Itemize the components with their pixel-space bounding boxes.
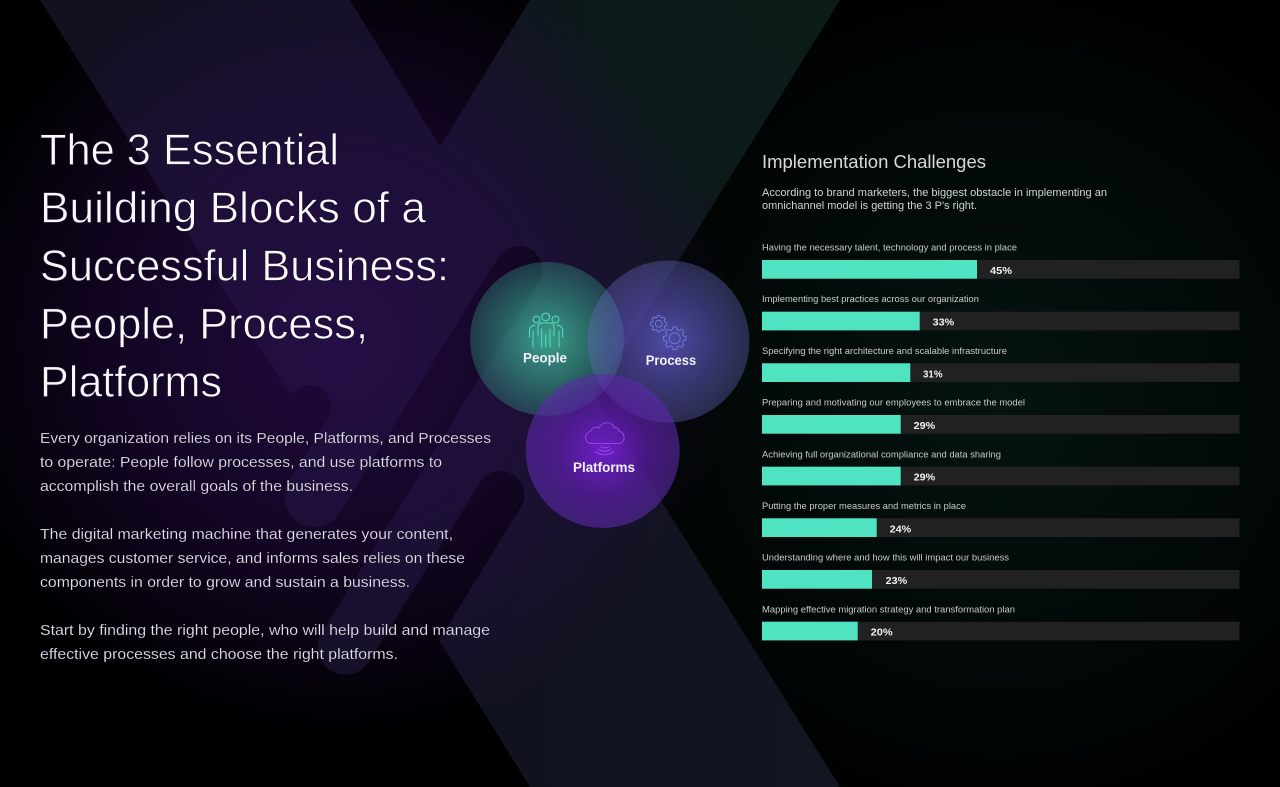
green glow (540, 0, 1280, 787)
label: platforms: Platforms (573, 460, 635, 475)
X logo watermark (40, 0, 840, 787)
paragraph 2 (40, 526, 465, 591)
circle: process (588, 260, 750, 422)
bar: 23%: Understanding where and how this will impact our business (762, 553, 1009, 564)
X green tint (440, 0, 840, 395)
bar: 31%: 31% (923, 368, 943, 380)
description: According to brand marketers, the biggest obstacle in implementing an (762, 187, 1107, 199)
bar: 20%: 20% (871, 627, 893, 639)
paragraph 1: to operate: People follow processes, and use platforms to (40, 454, 442, 471)
bar: 23%: 23% (886, 575, 908, 587)
bar: 33%: 33% (933, 317, 955, 329)
venn diagram (470, 260, 750, 528)
bar: 29% compliance: 29% (914, 472, 936, 484)
paragraph 1: Every organization relies on its People, Platforms, and Processes (40, 430, 491, 447)
paragraph 3 (40, 622, 490, 663)
paragraph 1 (40, 430, 491, 495)
icon: people (530, 313, 563, 347)
bar: 31%: Specifying the right architecture and scalable infrastructure (762, 346, 1007, 357)
title: People, Process, (40, 300, 368, 348)
paragraph 3: effective processes and choose the right platforms. (40, 646, 398, 663)
label: people: People (523, 350, 567, 366)
bar: 45%: Having the necessary talent, technology and process in place (762, 242, 1017, 254)
circle: platforms (526, 374, 680, 528)
description (762, 187, 1107, 212)
paragraph 2: The digital marketing machine that generates your content, (40, 526, 453, 543)
heading: Implementation Challenges (762, 152, 986, 172)
description: omnichannel model is getting the 3 P's right. (762, 200, 977, 212)
bar: 24%: Putting the proper measures and metrics in place (762, 501, 966, 512)
bar: 20% (762, 604, 1240, 640)
intro text block (40, 430, 491, 663)
icon: cloud (585, 423, 624, 455)
title (40, 126, 449, 406)
label: process: Process (646, 353, 696, 368)
icon: gears (650, 315, 686, 350)
bar: 29% employees: Preparing and motivating our employees to embrace the model (762, 398, 1025, 409)
title: Building Blocks of a (40, 184, 427, 232)
bar: 29% compliance: Achieving full organizational compliance and data sharing (762, 449, 1001, 460)
paragraph 2: components in order to grow and sustain a business. (40, 574, 410, 591)
bar: 29% employees: 29% (914, 420, 936, 432)
title: The 3 Essential (40, 126, 339, 174)
title: Successful Business: (40, 242, 449, 290)
bar: 29% employees (762, 398, 1240, 434)
paragraph 3: Start by finding the right people, who will help build and manage (40, 622, 490, 639)
bar: 45% (762, 242, 1240, 279)
bar chart (762, 242, 1240, 640)
circle: people (470, 262, 624, 416)
title: Platforms (40, 358, 222, 406)
bar: 31% (762, 346, 1240, 382)
paragraph 1: accomplish the overall goals of the business. (40, 478, 353, 495)
bar: 24% (762, 501, 1240, 537)
bar: 23% (762, 553, 1240, 589)
bar: 24%: 24% (890, 523, 912, 535)
bar: 20%: Mapping effective migration strategy and transformation plan (762, 604, 1015, 615)
bar: 33% (762, 294, 1240, 330)
panel: implementation challenges (762, 152, 1240, 640)
bar: 33%: Implementing best practices across our organization (762, 294, 979, 305)
paragraph 2: manages customer service, and informs sales relies on these (40, 550, 465, 567)
bar: 45%: 45% (990, 265, 1013, 277)
bar: 29% compliance (762, 449, 1240, 485)
purple glow (0, 0, 760, 787)
